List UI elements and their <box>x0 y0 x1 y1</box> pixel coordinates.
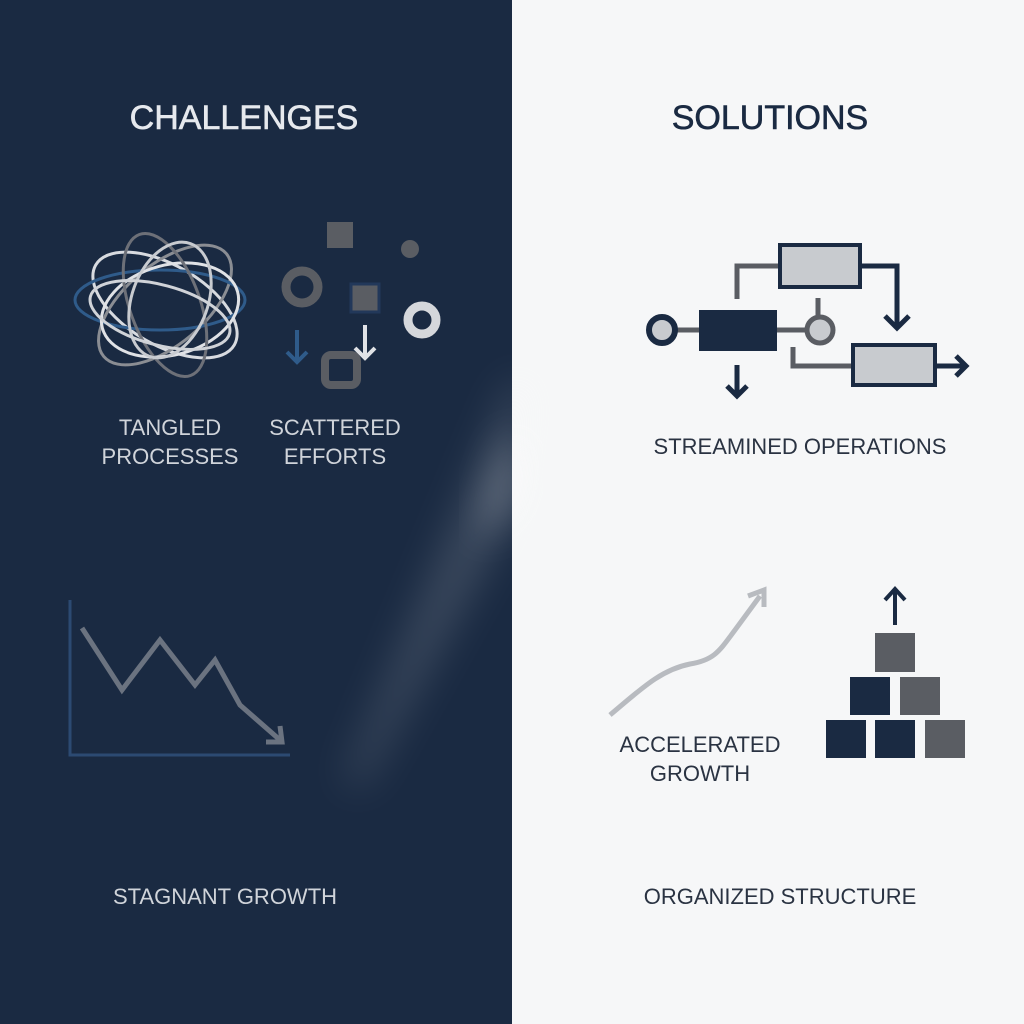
label: streamlined operations: STREAMINED OPERATIONS <box>654 434 946 459</box>
icon: streamlined flow <box>649 245 966 396</box>
panel: challenges background <box>0 0 512 1024</box>
label: accelerated growth: ACCELERATED <box>620 732 780 757</box>
panel: solutions background <box>512 0 1024 1024</box>
label: scattered efforts <box>269 415 401 469</box>
label: tangled processes: TANGLED <box>119 415 221 440</box>
label: tangled processes: PROCESSES <box>102 444 238 469</box>
icon: organized structure blocks <box>826 589 965 758</box>
label: stagnant growth: STAGNANT GROWTH <box>113 884 337 909</box>
label: scattered efforts: EFFORTS <box>284 444 386 469</box>
label: accelerated growth: GROWTH <box>650 761 750 786</box>
icon: tangled processes <box>75 223 254 387</box>
label: organized structure: ORGANIZED STRUCTURE <box>644 884 916 909</box>
label: tangled processes <box>102 415 238 469</box>
icon: scattered efforts <box>286 222 436 385</box>
label: scattered efforts: SCATTERED <box>269 415 401 440</box>
title: solutions: SOLUTIONS <box>672 99 868 137</box>
chart: stagnant growth <box>70 600 290 755</box>
title: challenges: CHALLENGES <box>130 99 358 137</box>
icon: accelerated growth curve <box>610 590 764 715</box>
label: accelerated growth <box>620 732 780 786</box>
